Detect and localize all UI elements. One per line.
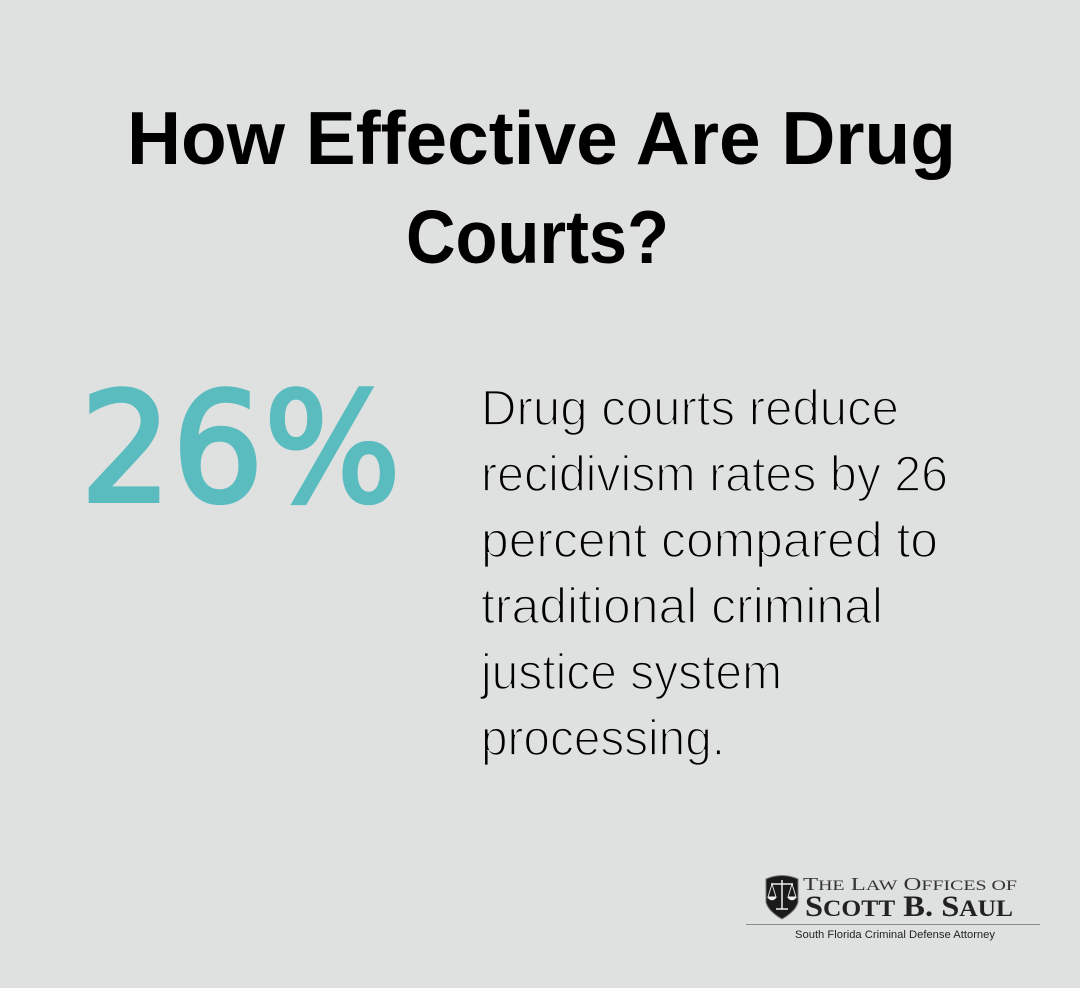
description text: traditional criminal: [481, 578, 883, 634]
firm name line 2: SCOTT B. SAUL: [805, 890, 1013, 923]
description text: percent compared to: [481, 512, 938, 568]
description text: Drug courts reduce: [481, 380, 899, 436]
title: How Effective Are Drug: [127, 96, 956, 180]
icon: shield with scales: [766, 876, 798, 919]
divider line: [746, 924, 1040, 925]
description text: [479, 380, 948, 766]
statistic: 26%: 26%: [80, 360, 401, 537]
description text: processing.: [481, 710, 725, 766]
title: [127, 96, 956, 279]
firm name line 1: T HE L AW O FFICES OF: [803, 874, 1017, 894]
description text: justice system: [479, 644, 782, 700]
title: Courts?: [406, 195, 669, 279]
law office logo: [746, 874, 1040, 941]
description text: recidivism rates by 26: [481, 446, 948, 502]
tagline: South Florida Criminal Defense Attorney: [795, 929, 996, 941]
